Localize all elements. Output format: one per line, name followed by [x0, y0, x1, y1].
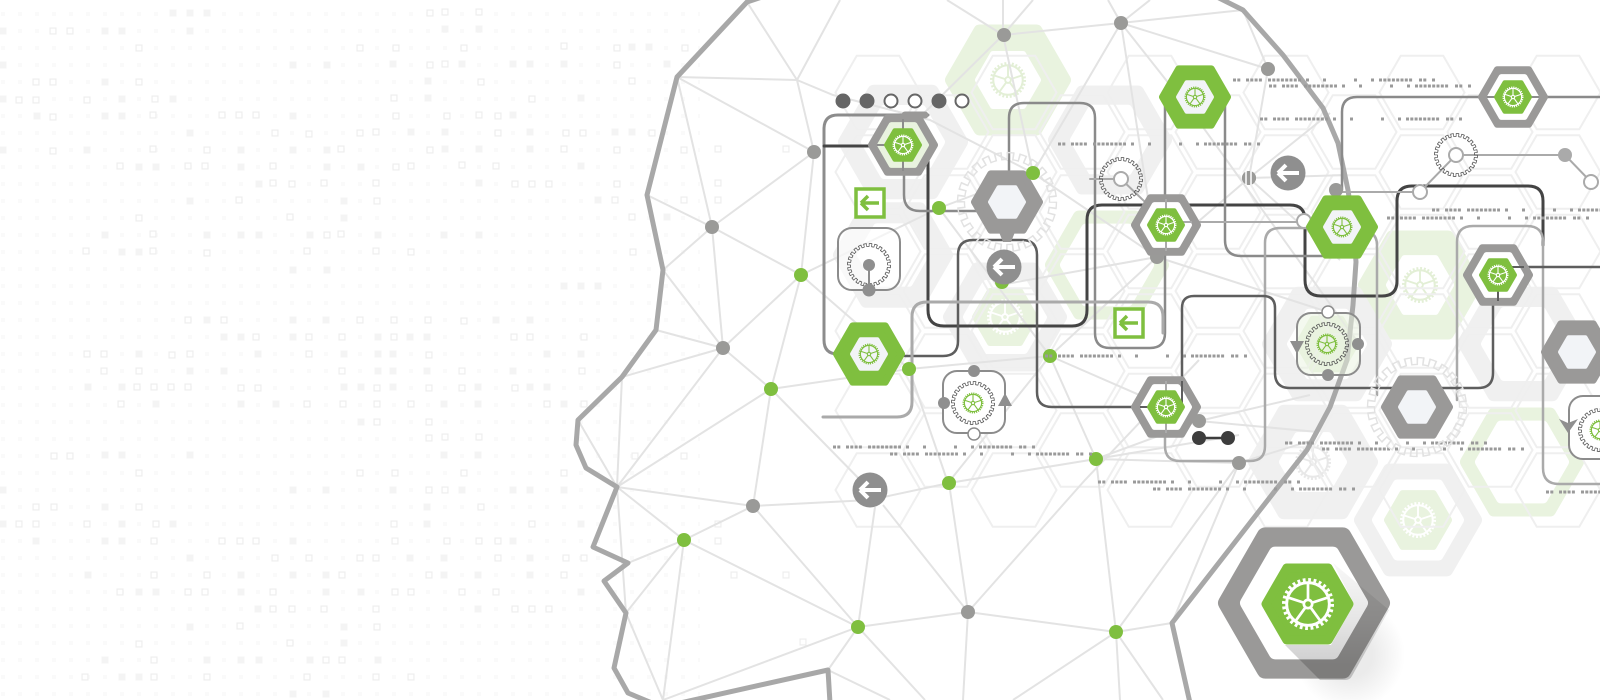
gear box: right edge [1559, 396, 1600, 459]
green arrow box: centre [1115, 309, 1143, 337]
hexagon outline grid [836, 56, 1600, 527]
ring hexagon: top left [872, 118, 934, 172]
status dots row [836, 94, 968, 108]
green arrow box: left [856, 189, 884, 217]
network nodes [677, 16, 1343, 639]
outlined gear behind grey hexagon: centre [958, 153, 1056, 251]
polygon network lines [578, 0, 1358, 700]
grey hexagon: centre [975, 174, 1039, 242]
background: dotted square pattern [0, 0, 803, 700]
gear box: left upper [838, 228, 900, 296]
ring hexagon: centre [1134, 198, 1198, 252]
arrow circle: upper right [1270, 156, 1306, 190]
green hexagon: top [1163, 69, 1227, 125]
gear box: right centre [1290, 306, 1364, 381]
ring hexagon: lower centre [1134, 380, 1198, 434]
arrow circle: centre [986, 250, 1022, 284]
green hexagon: left lower [837, 326, 901, 382]
sprocket: top centre [1100, 158, 1142, 200]
large gear hexagon [1227, 536, 1405, 700]
grey hexagon: right edge [1545, 324, 1600, 380]
green node above centre gear [1026, 166, 1040, 180]
green hexagon: centre right [1310, 199, 1374, 255]
pale background hexagons [839, 31, 1582, 570]
outlined gear behind grey hexagon: lower right [1368, 358, 1466, 456]
dotted data lines [833, 80, 1600, 492]
sprocket: top right with connectors [1297, 134, 1598, 228]
ring hexagon: right [1466, 248, 1530, 302]
gear box: centre lower [938, 365, 1012, 440]
striped node [1242, 171, 1256, 185]
circuit lines [823, 97, 1600, 484]
grey hexagon: lower right [1385, 379, 1449, 435]
dumbbell connector [1192, 431, 1235, 445]
ring hexagon: top right [1482, 70, 1544, 124]
arrow circle: lower left [852, 472, 888, 508]
head outline [576, 0, 1356, 700]
